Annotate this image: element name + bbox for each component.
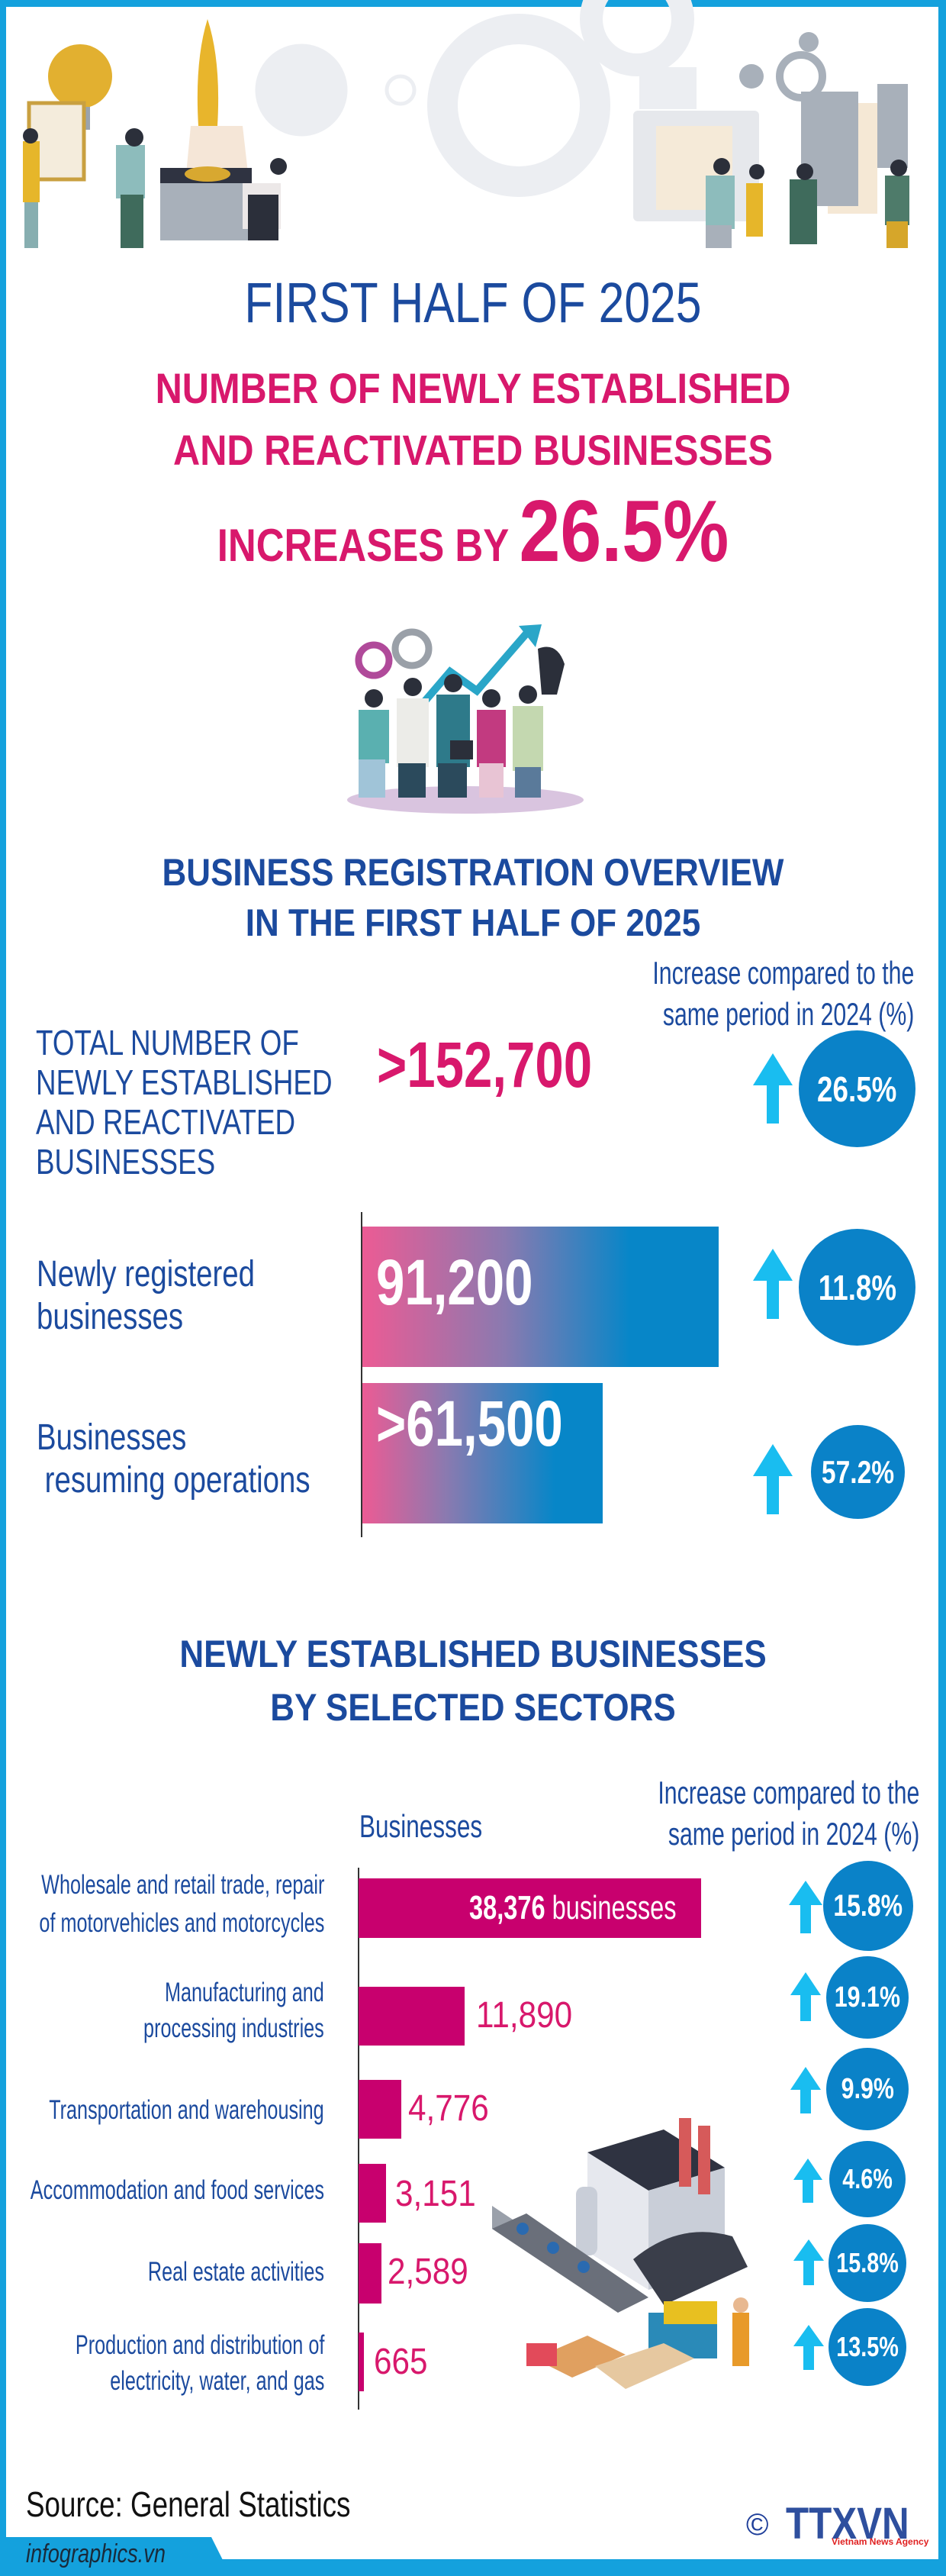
row: real estate: Real estate activities [148, 2257, 324, 2287]
badge: 26.5%: 26.5% [817, 1069, 897, 1108]
source: Source: General Statistics [26, 2484, 350, 2524]
row: accommodation: Accommodation and food services [31, 2175, 324, 2205]
bar: >61,500: >61,500 [376, 1388, 563, 1459]
row: accommodation [31, 2141, 906, 2223]
row: manufacturing: 11,890 [476, 1995, 572, 2036]
column header: increase compared [658, 1775, 919, 1852]
row: resuming [37, 1383, 905, 1523]
headline: NUMBER OF NEWLY ESTABLISHED [156, 364, 790, 412]
label: total number [36, 1023, 333, 1182]
headline: AND REACTIVATED BUSINESSES [173, 426, 773, 474]
icon: lightbulb [48, 44, 112, 130]
icon: arrow up [753, 1444, 793, 1514]
row: transportation: 9.9% [841, 2073, 894, 2105]
logo: TTXVN: TTXVN [786, 2499, 909, 2549]
label: resuming operations [45, 1460, 311, 1501]
badge: 11.8% [799, 1229, 915, 1346]
badge: 26.5% [799, 1030, 915, 1147]
row: transportation: 4,776 [408, 2088, 489, 2129]
heading: business registration overview: IN THE FIRST HALF OF 2025 [246, 901, 700, 944]
row: electricity: 13.5% [836, 2331, 899, 2362]
label [37, 1417, 311, 1501]
sector rows [31, 1861, 913, 2396]
row: electricity [76, 2308, 906, 2396]
row: transportation [49, 2048, 909, 2139]
heading: sectors: NEWLY ESTABLISHED BUSINESSES [179, 1633, 767, 1675]
illustration: team with growth arrow [347, 624, 584, 814]
row: real estate [148, 2224, 906, 2304]
footer tab: infographics.vn [0, 2537, 223, 2560]
badge: 57.2%: 57.2% [822, 1453, 894, 1490]
row: newly registered [37, 1227, 915, 1367]
icon: arrow up [753, 1053, 793, 1124]
row: real estate: 2,589 [388, 2252, 468, 2292]
label: Newly registered [37, 1254, 255, 1294]
column header: businesses: Businesses [359, 1808, 482, 1844]
icon: rocket [160, 19, 287, 240]
bar: 91,200: 91,200 [376, 1246, 533, 1318]
logo: TTXVN: © [746, 2508, 768, 2542]
footer band [0, 2559, 946, 2576]
heading: sectors: BY SELECTED SECTORS [270, 1686, 676, 1729]
label: total number: NEWLY ESTABLISHED [36, 1062, 333, 1102]
row: wholesale: 15.8% [834, 1888, 903, 1922]
row: accommodation: 4.6% [842, 2163, 893, 2194]
row: real estate: 15.8% [836, 2247, 899, 2278]
heading: business registration overview [162, 851, 784, 944]
badge: 57.2% [811, 1425, 905, 1519]
row: manufacturing: processing industries [143, 2013, 324, 2043]
column header: increase compared [652, 955, 914, 1032]
row: electricity: Production and distribution of [76, 2330, 324, 2360]
bar: >61,500 [362, 1383, 603, 1523]
icon: flipchart and people left [23, 103, 145, 248]
icon: screens and gears right [633, 32, 909, 248]
column header: increase compared: Increase compared to the [652, 955, 914, 991]
row: accommodation: 3,151 [395, 2174, 476, 2214]
label: businesses [37, 1297, 183, 1337]
row: wholesale: Wholesale and retail trade, repair [41, 1870, 324, 1900]
axis line [358, 1868, 359, 2410]
title: first half of 2025: FIRST HALF OF 2025 [244, 271, 702, 334]
headline [156, 364, 790, 474]
row: wholesale: 38,376 businesses [469, 1889, 677, 1926]
illustration: factory [492, 2118, 749, 2389]
logo: TTXVN [746, 2499, 929, 2549]
label: total number: BUSINESSES [36, 1142, 215, 1182]
label: Businesses [37, 1417, 186, 1458]
row: manufacturing [143, 1956, 909, 2046]
logo: TTXVN: Vietnam News Agency [832, 2536, 928, 2547]
heading: sectors [179, 1633, 767, 1729]
bar: 91,200 [362, 1227, 719, 1367]
column header: increase compared: same period in 2024 (%) [663, 996, 914, 1032]
heading: business registration overview: BUSINESS REGISTRATION OVERVIEW [162, 851, 784, 894]
row: manufacturing: 19.1% [835, 1981, 900, 2013]
icon: arrow up [753, 1249, 793, 1319]
label [37, 1254, 255, 1337]
row: transportation: Transportation and warehousing [50, 2095, 324, 2125]
row: wholesale [39, 1861, 913, 1951]
label: total number: TOTAL NUMBER OF [36, 1023, 299, 1062]
row: electricity: 665 [374, 2342, 427, 2382]
row: manufacturing: Manufacturing and [165, 1978, 324, 2007]
label: total number: AND REACTIVATED [36, 1102, 295, 1142]
text: infographics.vn [26, 2539, 166, 2568]
header illustration [23, 0, 909, 248]
headline: increases by 26.5%: INCREASES BY 26.5% [217, 483, 729, 580]
row: electricity: electricity, water, and gas [110, 2366, 324, 2396]
column header: increase compared: Increase compared to the [658, 1775, 919, 1810]
column header: increase compared: same period in 2024 (%) [668, 1816, 919, 1852]
axis line [361, 1212, 362, 1537]
row: wholesale: of motorvehicles and motorcycles [39, 1908, 324, 1938]
row: total [36, 1023, 915, 1182]
value: >152,700: >152,700 [377, 1029, 592, 1101]
badge: 11.8%: 11.8% [818, 1267, 896, 1307]
